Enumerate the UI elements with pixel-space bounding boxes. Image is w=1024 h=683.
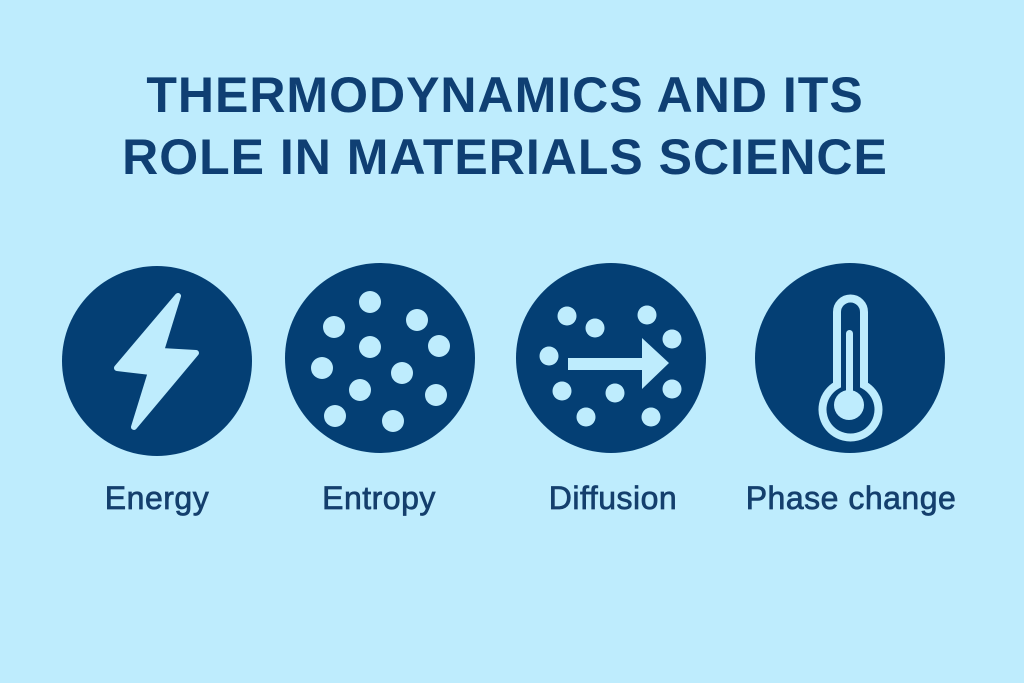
icon: entropy particles <box>285 263 475 453</box>
icon: thermometer <box>755 263 945 453</box>
label: diffusion: Diffusion <box>549 480 677 516</box>
title: ROLE IN MATERIALS SCIENCE <box>122 129 888 185</box>
label: energy: Energy <box>105 480 209 516</box>
title: THERMODYNAMICS AND ITS <box>146 67 864 123</box>
title <box>122 67 888 185</box>
label: entropy: Entropy <box>322 480 436 516</box>
icon: energy lightning <box>62 266 252 456</box>
icon: diffusion <box>516 263 706 453</box>
label: phase change: Phase change <box>746 480 956 516</box>
